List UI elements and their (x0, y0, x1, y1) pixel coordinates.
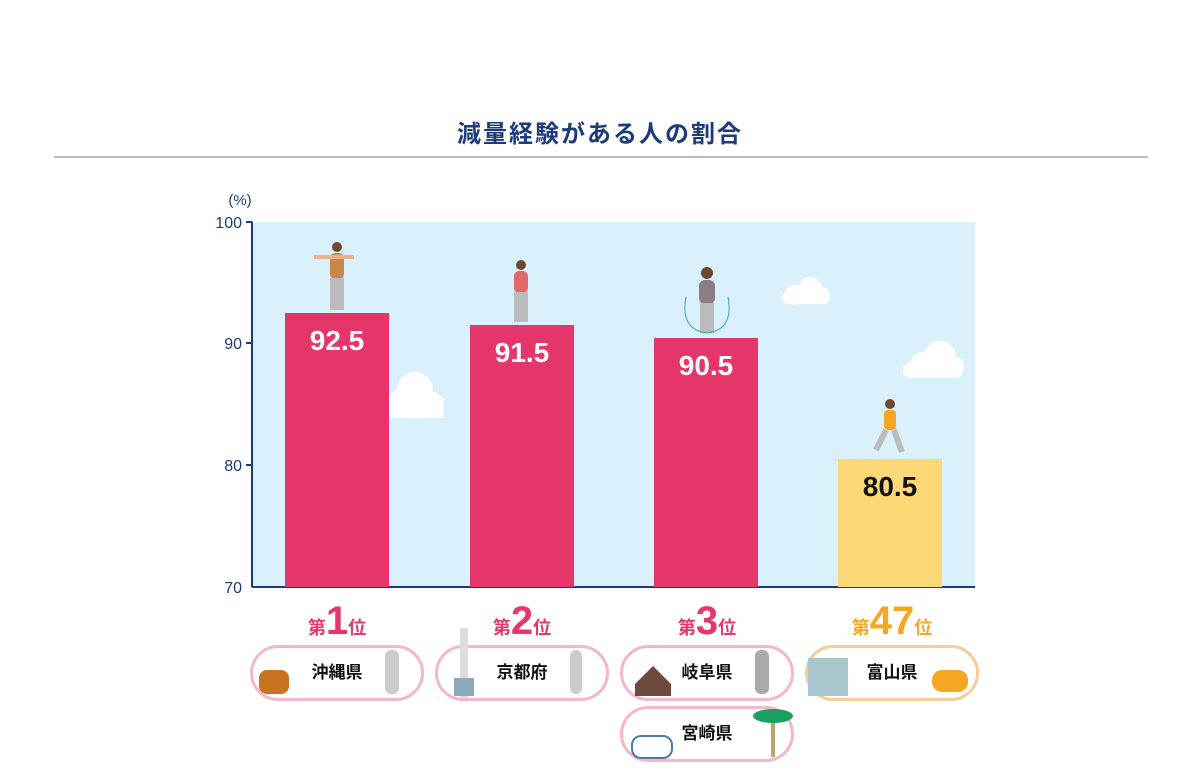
pill: okinawa: 沖縄県 (312, 663, 362, 682)
axis (215, 192, 252, 597)
pill: miyazaki (620, 706, 794, 762)
pill: okinawa (250, 645, 424, 701)
text: 第3位 (678, 599, 736, 643)
text: 第47位 (852, 599, 932, 643)
icon: figures (314, 242, 902, 452)
axis: 100 (215, 215, 242, 232)
pill: toyama: 富山県 (866, 663, 918, 682)
pill: gifu: 岐阜県 (682, 663, 732, 682)
pill: kyoto (435, 645, 609, 701)
pill: toyama (805, 645, 979, 701)
pill: miyazaki: 宮崎県 (682, 724, 732, 743)
axis: 70 (224, 580, 242, 597)
bar chart: 92.5 (310, 325, 364, 356)
axis: 80 (224, 458, 242, 475)
icon: clouds (387, 277, 964, 418)
rank labels: 第1位 (308, 599, 366, 643)
text: 第2位 (493, 599, 551, 643)
pill: gifu (620, 645, 794, 701)
bar chart: 80.5 (863, 471, 917, 502)
title: 減量経験がある人の割合 (457, 121, 743, 148)
bar chart: 91.5 (495, 337, 549, 368)
axis: 90 (224, 336, 242, 353)
pill: kyoto: 京都府 (496, 663, 548, 682)
axis: (%) (228, 192, 252, 209)
bars (285, 313, 389, 587)
bar chart: 90.5 (679, 350, 733, 381)
